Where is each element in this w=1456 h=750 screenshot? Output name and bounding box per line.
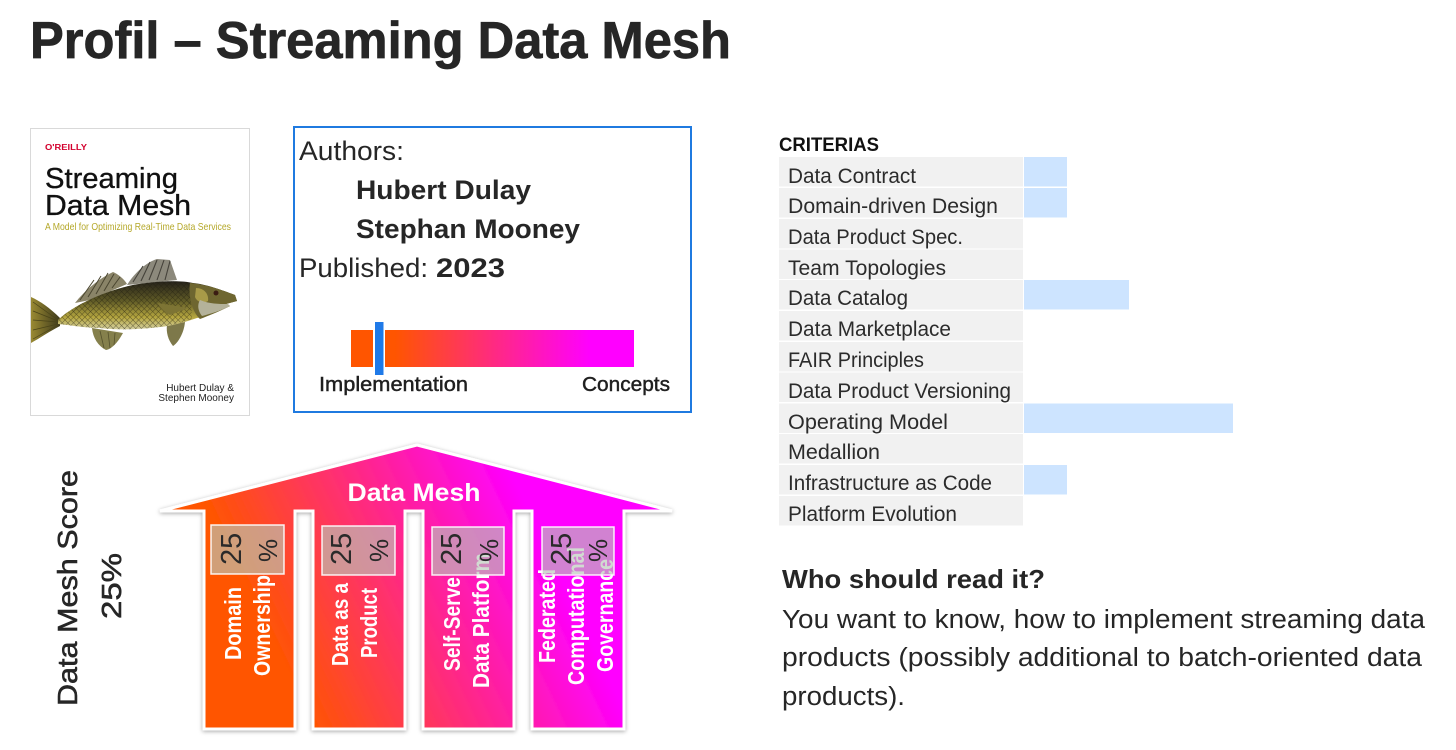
criteria labels: Medallion [788,441,880,464]
criteria labels: Data Contract [788,165,916,188]
data mesh score label: Data Mesh Score [52,470,83,706]
implementation to concepts gradient scale: Concepts [582,373,670,396]
pillar labels: Self-Serve [439,577,465,671]
criteria labels: Platform Evolution [788,503,957,526]
percent values: 25 [216,533,248,565]
criteria score bars [1024,157,1233,494]
percent values: % [253,539,283,562]
criteria labels: Data Product Versioning [788,380,1011,403]
percent values: % [474,539,504,562]
criteria labels: Operating Model [788,411,948,434]
text block: who should read it: products). [782,683,905,711]
text block: who should read it: products (possibly additional to batch-oriented data [782,644,1423,672]
book cover: Streaming [45,163,178,195]
house shape [160,445,672,729]
data mesh score label [52,470,127,706]
percent values: 25 [436,533,468,565]
text block: who should read it: You want to know, how to implement streaming data [782,606,1426,634]
book cover: Data Mesh [45,190,191,222]
data mesh score label: 25% [96,553,127,619]
percent values: % [364,539,394,562]
criteria labels: Team Topologies [788,257,946,280]
criterias heading: CRITERIAS [779,134,879,156]
pillar labels: Ownership [249,575,275,676]
pillar labels: Computational [563,547,589,685]
published year [299,253,505,283]
book cover: A Model for Optimizing Real-Time Data Services [45,221,231,233]
pillar labels: Domain [220,587,246,660]
text block: who should read it [782,564,1426,711]
text block: who should read it: Who should read it? [782,564,1045,594]
icon: fish [31,259,237,350]
book cover: O'REILLY [45,143,88,152]
percent values: 25 [326,533,358,565]
published year: 2023 [436,253,505,283]
implementation to concepts gradient scale: Implementation [319,373,468,396]
author names [356,175,580,244]
criteria labels: Data Product Spec. [788,226,963,249]
criteria labels: Data Marketplace [788,318,951,341]
author names: Hubert Dulay [356,175,531,205]
pillar labels: Governance [592,559,618,672]
authors label: Authors: [299,136,404,166]
criteria labels [788,165,1011,526]
book cover [30,128,250,416]
implementation to concepts gradient scale [319,322,670,396]
book cover: Hubert Dulay & [166,383,234,394]
criteria rows [779,157,1023,526]
criteria labels: Data Catalog [788,287,908,310]
panel: authors [294,127,691,412]
data mesh house diagram [160,445,672,729]
author names: Stephan Mooney [356,214,580,244]
roof label: Data Mesh [348,479,480,507]
published year: Published: [299,253,428,283]
title: Profil – Streaming Data Mesh [30,12,731,70]
percent values: % [583,539,613,562]
criteria labels: Domain-driven Design [788,195,998,218]
percent values: 25 [546,533,578,565]
pillar labels: Data as a [327,583,353,666]
pillar labels: Product [356,588,382,658]
percent values [216,533,613,565]
pillar labels [220,547,618,688]
panel: criterias [779,134,1233,526]
pillar labels: Federated [534,569,560,663]
percent boxes [211,525,614,575]
criteria labels: Infrastructure as Code [788,472,992,495]
book cover: Stephen Mooney [158,393,234,404]
criteria labels: FAIR Principles [788,349,924,372]
pillar labels: Data Platform [468,553,494,688]
